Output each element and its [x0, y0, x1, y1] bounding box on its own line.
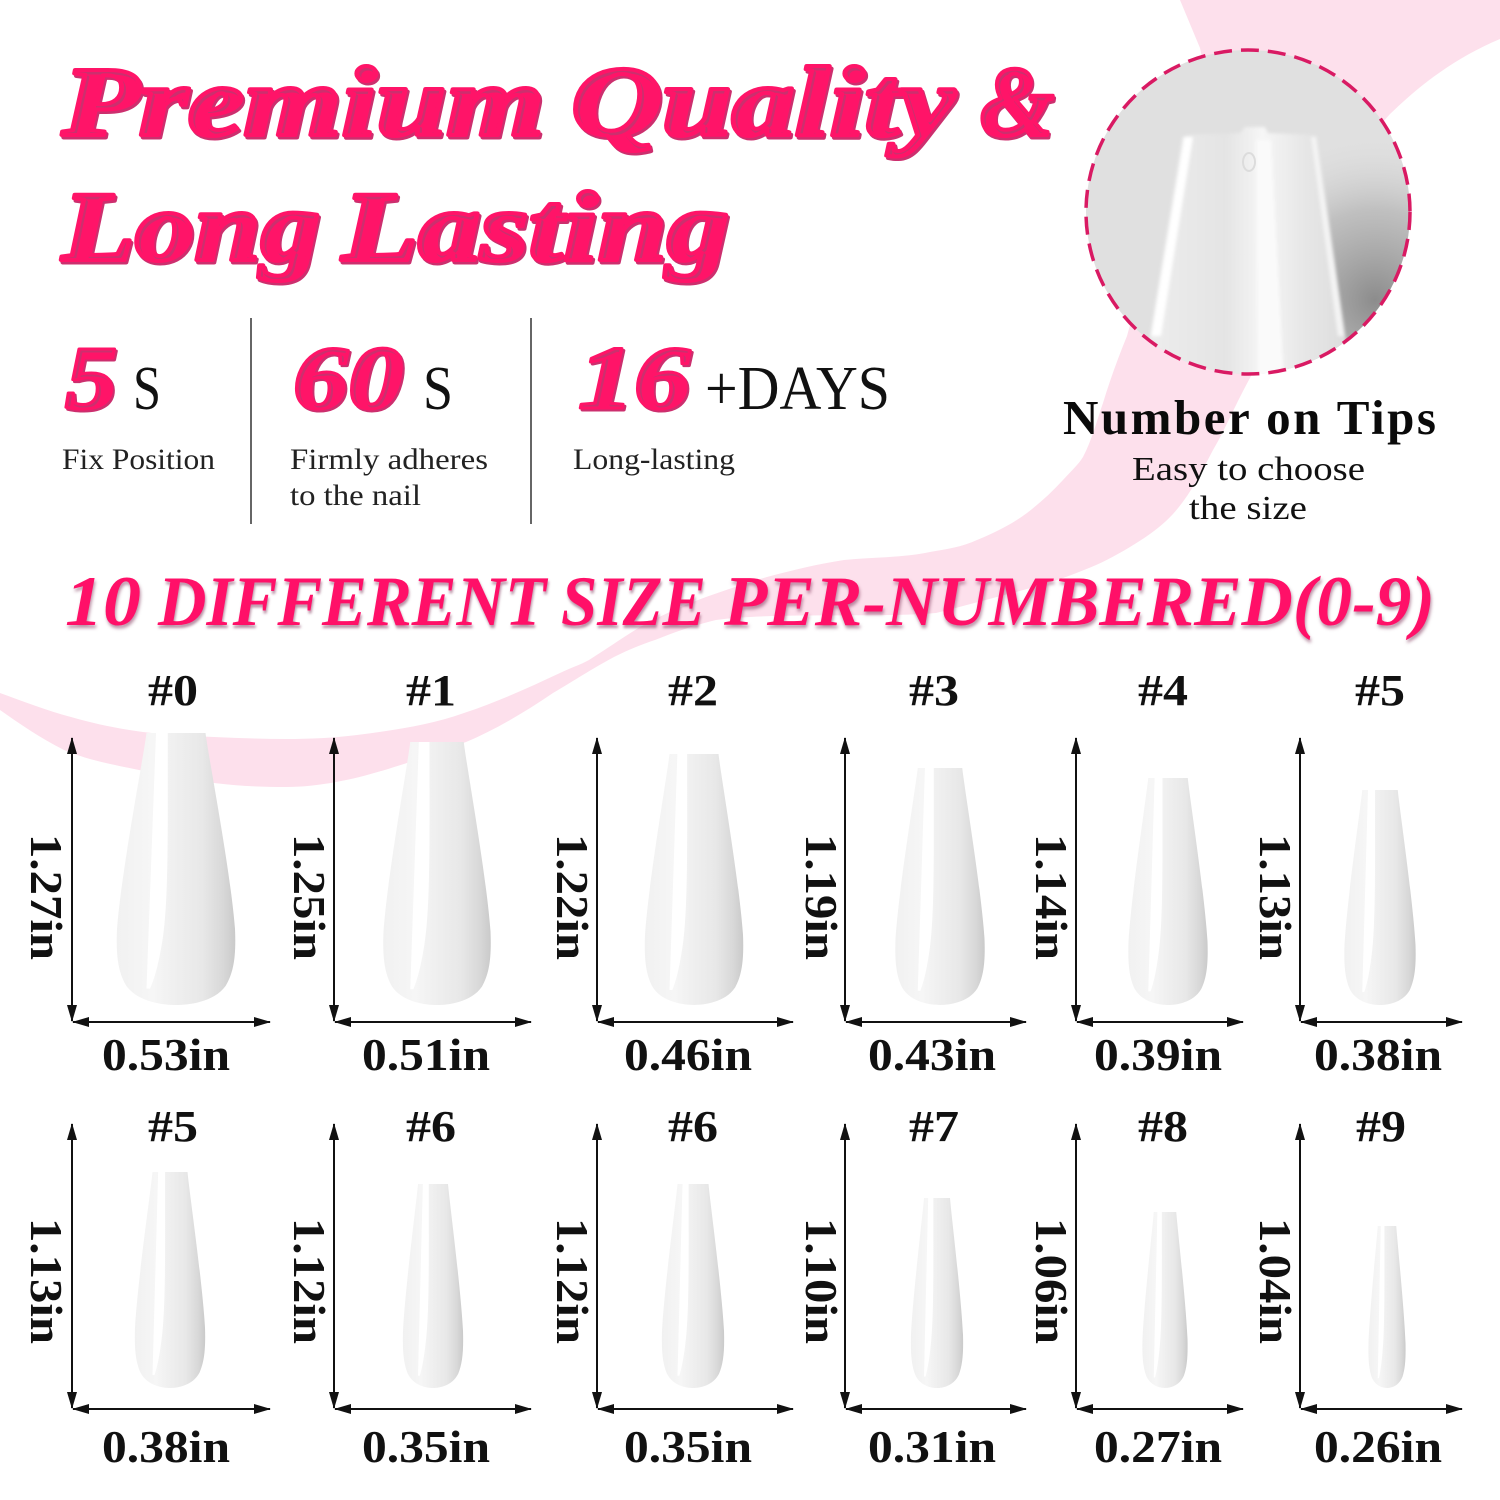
size #0 row 1: 0.53in: [102, 1029, 230, 1080]
title: Long: [61, 171, 320, 282]
subheading: 10: [65, 563, 141, 641]
size #7 row 2: 1.10in: [796, 1218, 847, 1344]
size #5 row 2: #5: [148, 1102, 198, 1151]
size #5 row 2: [21, 1102, 270, 1472]
title: Premium: [61, 46, 544, 157]
size #4 row 1: 1.14in: [1026, 834, 1077, 960]
size #6 second row 2: 1.12in: [547, 1218, 598, 1344]
pink ribbon background: [0, 0, 1500, 787]
subheading: PER-NUMBERED(0-9): [723, 563, 1435, 641]
title: Lasting: [341, 171, 729, 282]
size #6 row 2: [284, 1102, 531, 1472]
subheading: [65, 563, 1435, 641]
size #0 row 1: [21, 666, 270, 1080]
size #9 row 2: [1250, 1102, 1462, 1472]
size #9 row 2: 1.04in: [1250, 1218, 1301, 1344]
size #7 row 2: 0.31in: [868, 1421, 996, 1472]
size #6 second row 2: 0.35in: [624, 1421, 752, 1472]
callout: number on tips: [1063, 390, 1436, 527]
size #7 row 2: #7: [909, 1102, 959, 1151]
size #6 row 2: 1.12in: [284, 1218, 335, 1344]
size #3 row 1: 1.19in: [796, 834, 847, 960]
size #3 row 1: #3: [909, 666, 959, 715]
size #1 row 1: 1.25in: [284, 834, 335, 960]
stat: 60 s firmly adheres: Firmly adheres: [290, 443, 488, 476]
size #6 row 2: #6: [406, 1102, 456, 1151]
size #1 row 1: #1: [406, 666, 456, 715]
title: Quality: [571, 46, 956, 157]
size #5 row 2: 0.38in: [102, 1421, 230, 1472]
size #2 row 1: [547, 666, 793, 1080]
size #3 row 1: 0.43in: [868, 1029, 996, 1080]
stat: 60 s firmly adheres: S: [423, 355, 453, 423]
size #6 second row 2: #6: [668, 1102, 718, 1151]
stat: 16 +days long-lasting: 16: [578, 329, 690, 428]
stat: 5 s fix position: Fix Position: [62, 443, 215, 476]
size #4 row 1: [1026, 666, 1243, 1080]
size #8 row 2: 0.27in: [1094, 1421, 1222, 1472]
stat: 16 +days long-lasting: +DAYS: [705, 355, 890, 423]
size #4 row 1: 0.39in: [1094, 1029, 1222, 1080]
stat: 16 +days long-lasting: [573, 329, 890, 476]
size #3 row 1: [796, 666, 1026, 1080]
size #6 row 2: 0.35in: [362, 1421, 490, 1472]
stat: 5 s fix position: [62, 329, 215, 476]
size #8 row 2: 1.06in: [1026, 1218, 1077, 1344]
stat: 60 s firmly adheres: 60: [293, 329, 403, 428]
size #6 second row 2: [547, 1102, 793, 1472]
size #5 row 1: [1250, 666, 1462, 1080]
size #7 row 2: [796, 1102, 1026, 1472]
title: [61, 46, 1054, 282]
size #9 row 2: 0.26in: [1314, 1421, 1442, 1472]
size #2 row 1: #2: [668, 666, 718, 715]
size #0 row 1: 1.27in: [21, 834, 72, 960]
size #2 row 1: 1.22in: [547, 834, 598, 960]
size #0 row 1: #0: [148, 666, 198, 715]
size #5 row 1: 0.38in: [1314, 1029, 1442, 1080]
size #5 row 2: 1.13in: [21, 1218, 72, 1344]
size #8 row 2: [1026, 1102, 1243, 1472]
size #2 row 1: 0.46in: [624, 1029, 752, 1080]
circle: number on tip close-up: [1086, 50, 1410, 380]
stat: 60 s firmly adheres: [290, 329, 488, 512]
stat: 5 s fix position: S: [133, 355, 161, 423]
stat: 5 s fix position: 5: [65, 329, 117, 428]
size #1 row 1: 0.51in: [362, 1029, 490, 1080]
size #5 row 1: 1.13in: [1250, 834, 1301, 960]
callout: number on tips: Number on Tips: [1063, 390, 1436, 445]
title: &: [980, 46, 1054, 157]
subheading: DIFFERENT: [157, 563, 548, 641]
size #4 row 1: #4: [1138, 666, 1188, 715]
subheading: SIZE: [561, 563, 706, 641]
stat: 60 s firmly adheres: to the nail: [290, 479, 421, 512]
size #9 row 2: #9: [1356, 1102, 1406, 1151]
size #5 row 1: #5: [1355, 666, 1405, 715]
stat: 16 +days long-lasting: Long-lasting: [573, 443, 735, 476]
size #8 row 2: #8: [1138, 1102, 1188, 1151]
callout: number on tips: Easy to choose: [1132, 451, 1365, 488]
callout: number on tips: the size: [1189, 490, 1307, 527]
size #1 row 1: [284, 666, 531, 1080]
